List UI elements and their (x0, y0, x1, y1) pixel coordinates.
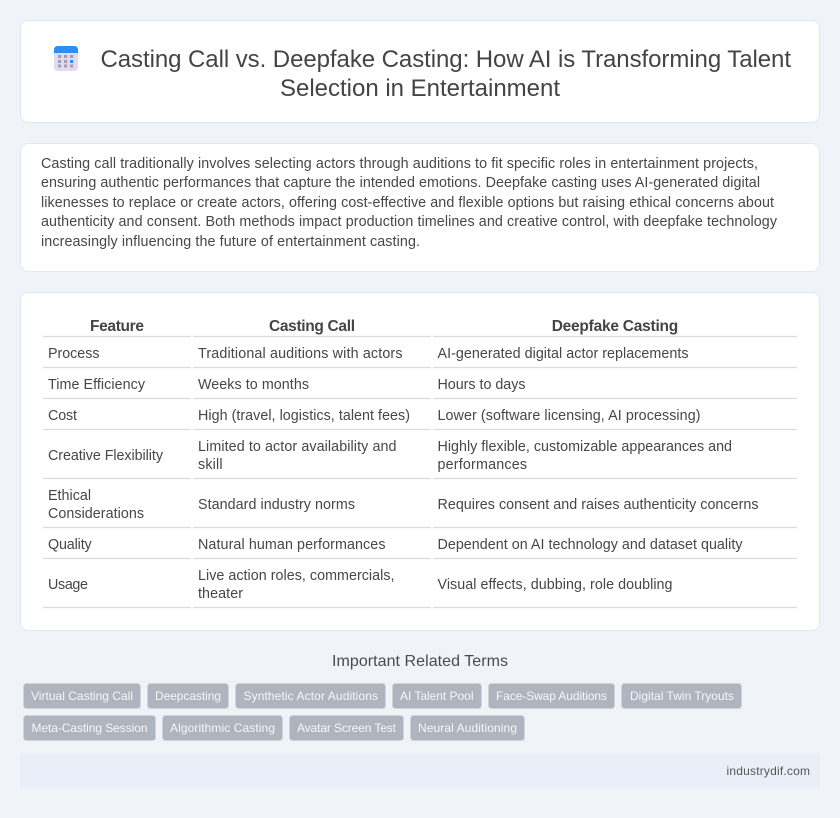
row: process: Traditional auditions with actors (198, 346, 402, 362)
row: quality: Quality (48, 537, 93, 553)
row: creative flexibility: Limited to actor availability and (198, 439, 397, 455)
table header (90, 318, 678, 335)
tag (24, 684, 140, 708)
row: creative flexibility: skill (198, 457, 222, 473)
tag (392, 684, 482, 708)
text block: introduction paragraph (41, 156, 778, 250)
tag: Digital Twin Tryouts (630, 689, 734, 703)
tag: Virtual Casting Call (31, 689, 133, 703)
row: ethical considerations: Requires consent and raises authenticity concerns (438, 497, 758, 513)
row: creative flexibility: Creative Flexibility (48, 448, 164, 464)
row: usage: Live action roles, commercials, (198, 568, 394, 584)
row: time efficiency: Hours to days (438, 377, 526, 393)
icon: calendar (54, 46, 78, 71)
tag: AI Talent Pool (400, 689, 474, 703)
tag (162, 716, 282, 740)
panel: introduction (20, 144, 820, 272)
tag: Deepcasting (155, 689, 221, 703)
row: process: AI-generated digital actor replacements (438, 346, 688, 362)
row: ethical considerations: Considerations (48, 506, 144, 522)
title: Casting Call vs. Deepfake Casting: How AI is Transforming Talent (100, 46, 791, 73)
table header: Deepfake Casting (552, 318, 678, 335)
tag (622, 684, 742, 708)
table header: Casting Call (269, 318, 355, 335)
table header: Feature (90, 318, 144, 335)
tag (410, 716, 524, 740)
row: time efficiency: Weeks to months (198, 377, 309, 393)
text block: introduction paragraph: Casting call traditionally involves selecting actors through auditions to fit specific roles in entertainment projects, (41, 156, 758, 172)
tag (148, 684, 228, 708)
row: quality: Natural human performances (198, 537, 386, 553)
row: time efficiency: Time Efficiency (48, 377, 146, 393)
row: quality (48, 537, 743, 553)
tag: Synthetic Actor Auditions (244, 689, 378, 703)
text block: introduction paragraph: authenticity and consent. Both methods impact production timelines and creative control, with deepfake technology (41, 214, 778, 230)
tag (24, 716, 156, 740)
tag: Neural Auditioning (418, 721, 517, 735)
title (100, 46, 791, 102)
tag: Algorithmic Casting (170, 721, 275, 735)
heading: important related terms: Important Related Terms (332, 653, 508, 670)
title: Selection in Entertainment (280, 75, 560, 102)
tag: Face-Swap Auditions (496, 689, 607, 703)
tag: Avatar Screen Test (297, 721, 397, 735)
row: creative flexibility: Highly flexible, customizable appearances and (438, 439, 732, 455)
row: ethical considerations (48, 488, 758, 522)
text block: introduction paragraph: likenesses to replace or create actors, offering cost-effective and flexible options but raising ethical concerns about (41, 195, 774, 211)
row: usage: Usage (48, 577, 88, 593)
row: usage (48, 568, 673, 602)
row: process (48, 346, 688, 362)
tag (488, 684, 614, 708)
footer (20, 754, 820, 788)
row: creative flexibility (48, 439, 732, 473)
panel: comparison table (20, 292, 820, 630)
row: ethical considerations: Standard industry norms (198, 497, 355, 513)
row: cost (48, 408, 700, 424)
text block: introduction paragraph: increasingly influencing the future of entertainment casting. (41, 234, 420, 250)
footer: industrydif.com (726, 764, 810, 778)
row: process: Process (48, 346, 100, 362)
tag: Meta-Casting Session (32, 721, 148, 735)
panel: title card (20, 20, 820, 122)
row: cost: High (travel, logistics, talent fees) (198, 408, 410, 424)
row: usage: Visual effects, dubbing, role doubling (438, 577, 673, 593)
tags: related terms (24, 684, 742, 740)
row: cost: Lower (software licensing, AI processing) (438, 408, 700, 424)
row: quality: Dependent on AI technology and dataset quality (438, 537, 743, 553)
row: creative flexibility: performances (438, 457, 527, 473)
row: ethical considerations: Ethical (48, 488, 91, 504)
row: time efficiency (48, 377, 526, 393)
tag (236, 684, 386, 708)
text block: introduction paragraph: ensuring authentic performances that capture the intended emotions. Deepfake casting uses AI-generated digital (41, 175, 760, 191)
row: usage: theater (198, 586, 243, 602)
tag (290, 716, 404, 740)
row: cost: Cost (48, 408, 77, 424)
